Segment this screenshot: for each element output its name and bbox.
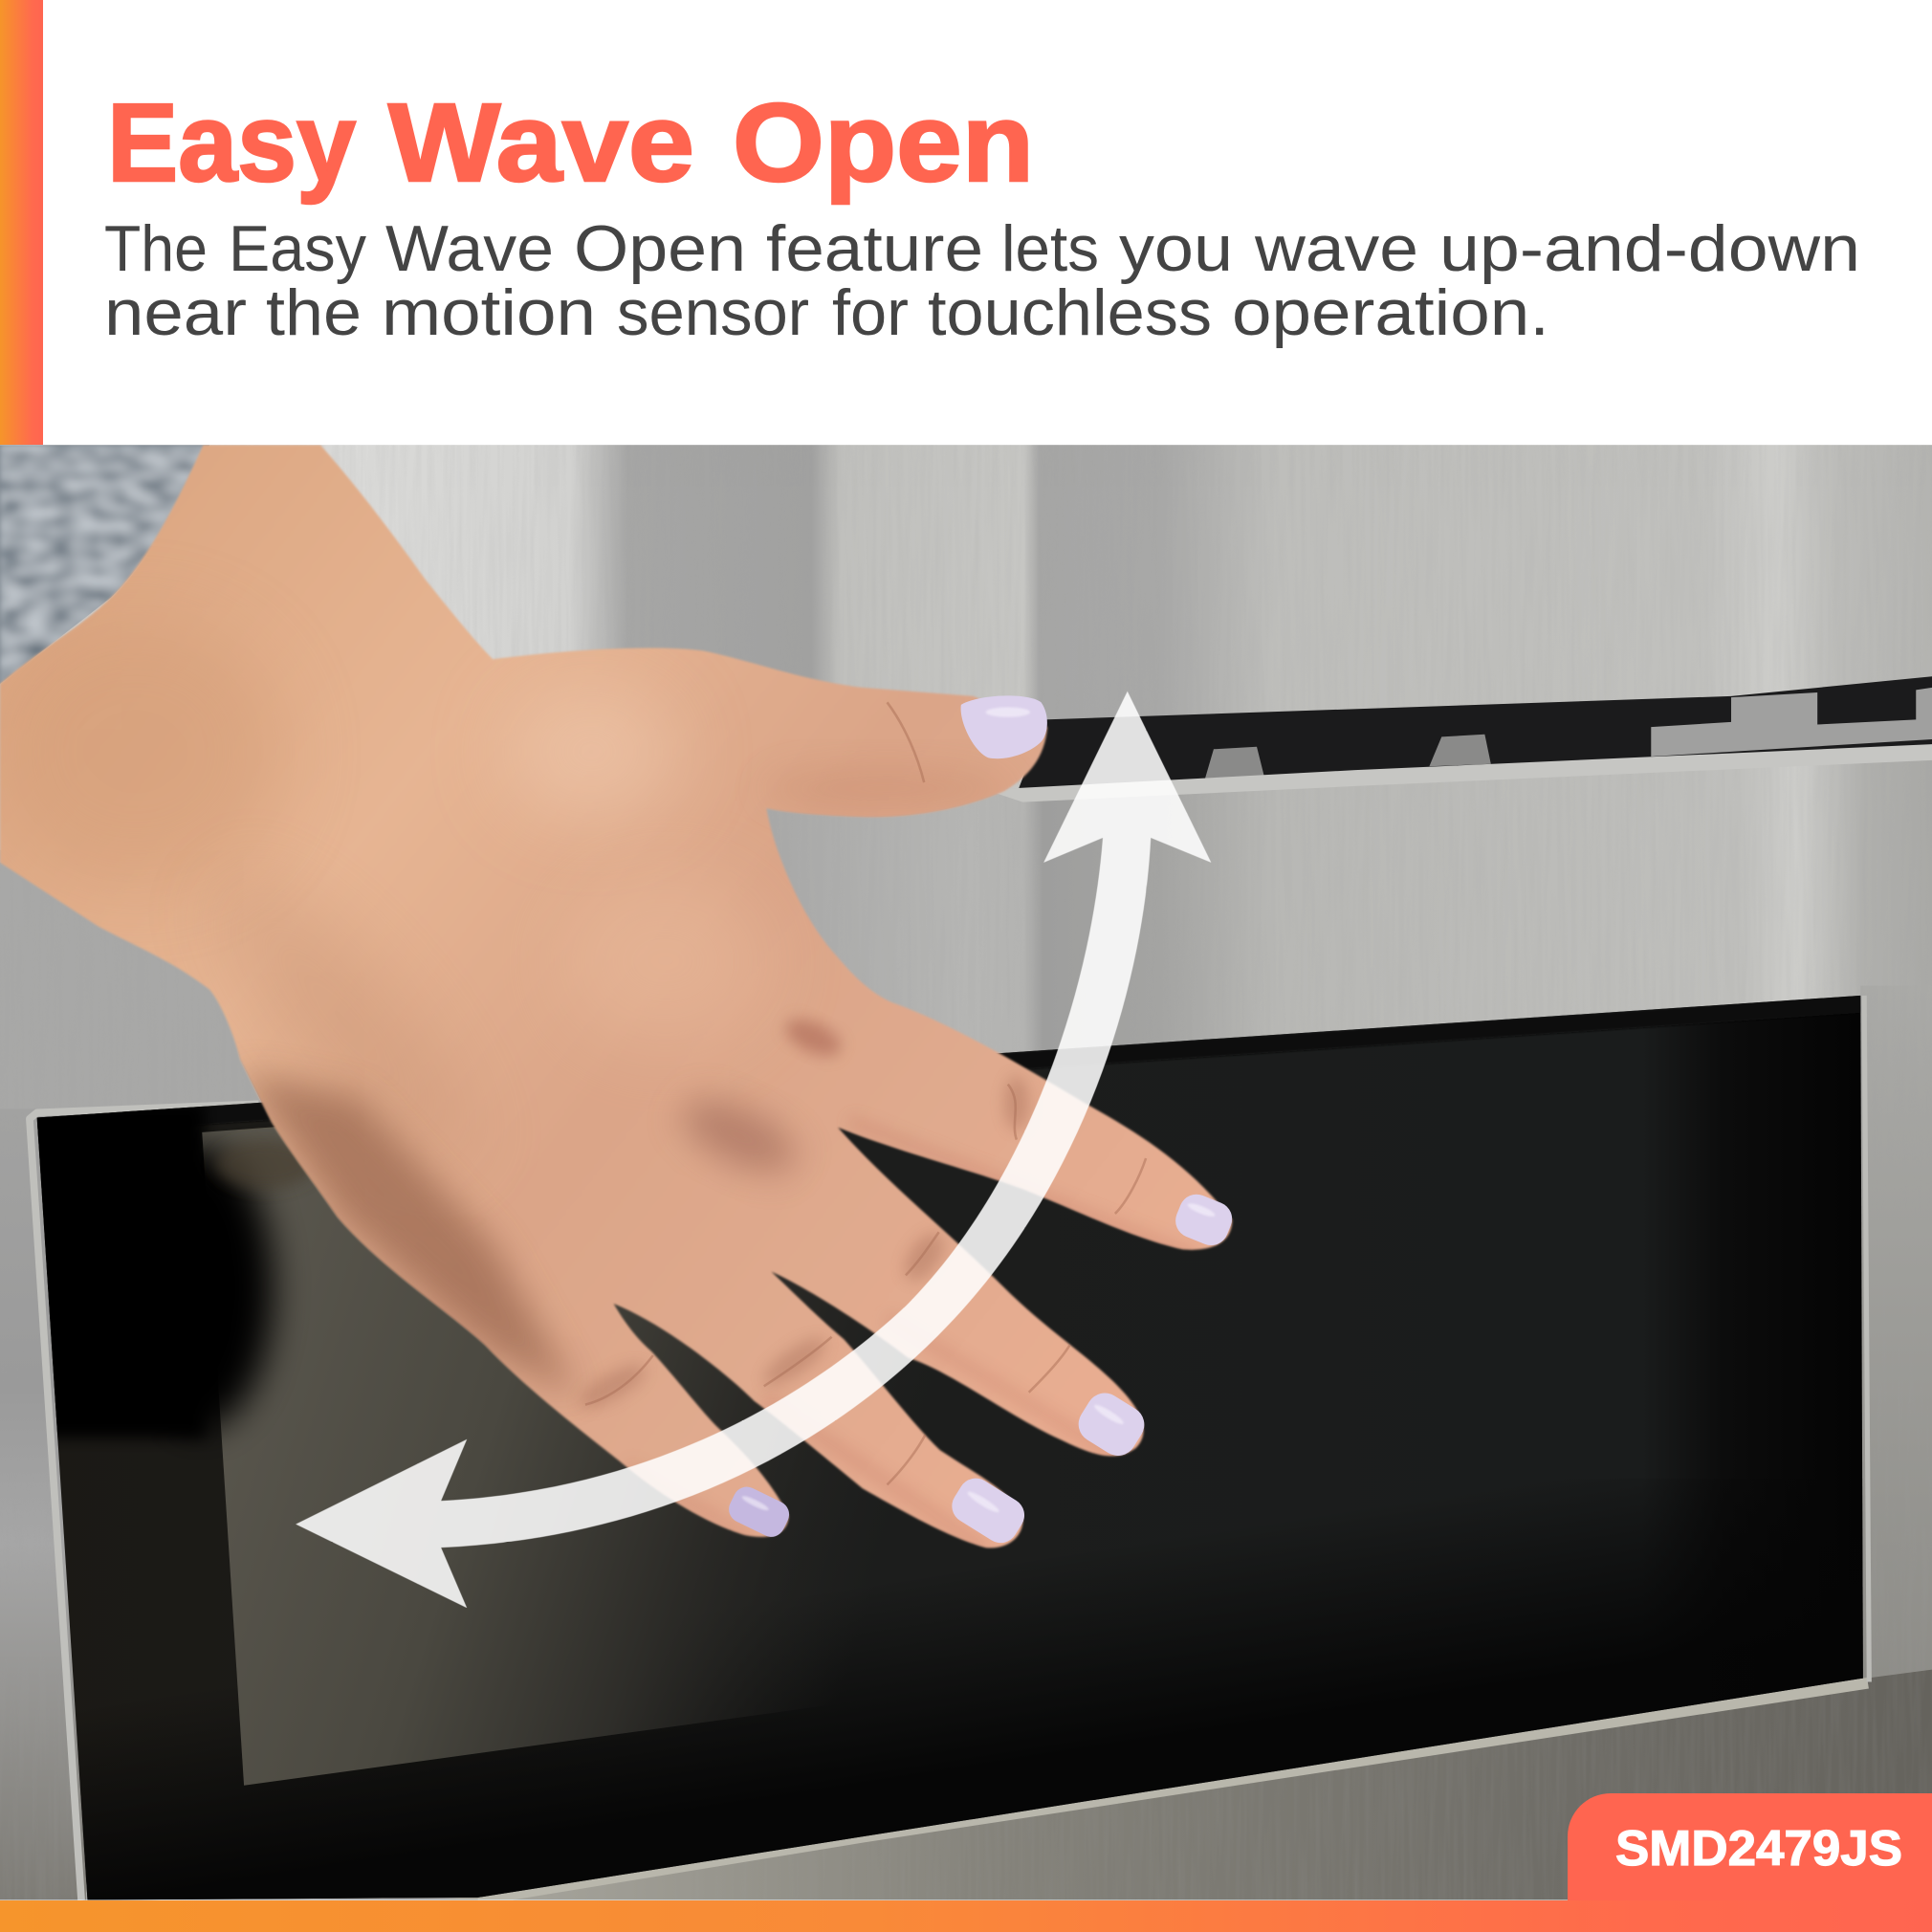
window glass xyxy=(25,996,1873,1922)
subtitle text: up-and-down xyxy=(1439,212,1860,285)
steel left area xyxy=(0,863,61,1109)
photo: hand over microwave drawer xyxy=(0,445,1932,1932)
knuckle creases xyxy=(585,702,1146,1484)
bottom gradient bar xyxy=(0,1900,1932,1932)
fingers shading xyxy=(850,1121,1196,1257)
brushed metal texture xyxy=(0,445,1932,1900)
fingernails xyxy=(724,695,1238,1549)
subtitle text: operation. xyxy=(1232,276,1549,349)
nail: index xyxy=(1171,1189,1238,1251)
model number badge xyxy=(1568,1793,1932,1900)
title: Wave xyxy=(388,80,694,205)
handle slot xyxy=(1018,676,1932,791)
subtitle text: you xyxy=(1119,212,1233,285)
subtitle text: The xyxy=(104,212,208,285)
model number badge: SMD2479JS xyxy=(1615,1821,1902,1877)
microwave window frame xyxy=(30,996,1869,1900)
subtitle text: feature xyxy=(766,212,983,285)
warm tint on mesh top xyxy=(215,1140,315,1189)
subtitle text: Easy xyxy=(229,212,366,285)
nail: thumb xyxy=(961,695,1047,758)
bottom glass shade xyxy=(78,1486,1863,1899)
window top edge shadow xyxy=(37,996,1860,1136)
left accent bar xyxy=(0,0,43,445)
subtitle text: near xyxy=(104,276,247,349)
subtitle text: the xyxy=(266,276,362,349)
stainless steel lower panel xyxy=(0,739,1932,1932)
hand xyxy=(0,445,1232,1550)
stainless steel upper panel xyxy=(0,445,1932,864)
subtitle text: for xyxy=(832,276,909,349)
panel lip highlight xyxy=(986,744,1932,802)
title: Open xyxy=(733,80,1034,205)
nail: middle xyxy=(1071,1386,1152,1462)
title xyxy=(107,80,1034,205)
nail: pinky xyxy=(724,1482,794,1542)
double-headed curved arrow xyxy=(296,692,1211,1608)
subtitle text: Open xyxy=(574,212,746,285)
dark reflection on mesh xyxy=(201,1131,295,1444)
subtitle text: wave xyxy=(1254,212,1418,285)
knuckle wrinkles blur xyxy=(574,1076,1029,1416)
subtitle text: Wave xyxy=(385,212,554,285)
knitted sleeve xyxy=(0,445,215,692)
subtitle text xyxy=(104,212,1860,349)
header panel xyxy=(0,0,1932,445)
subtitle text: motion xyxy=(382,276,596,349)
subtitle text: sensor xyxy=(617,276,809,349)
steel left column xyxy=(0,1109,86,1900)
hand shading xyxy=(0,616,283,888)
steel bottom strip xyxy=(444,1670,1932,1900)
steel right column xyxy=(1860,986,1932,1725)
nail: ring xyxy=(946,1472,1031,1549)
title: Easy xyxy=(107,80,356,205)
subtitle text: lets xyxy=(1001,212,1099,285)
subtitle text: touchless xyxy=(928,276,1212,349)
dark left margin xyxy=(25,1103,205,1438)
interior mesh panel xyxy=(202,1127,834,1786)
